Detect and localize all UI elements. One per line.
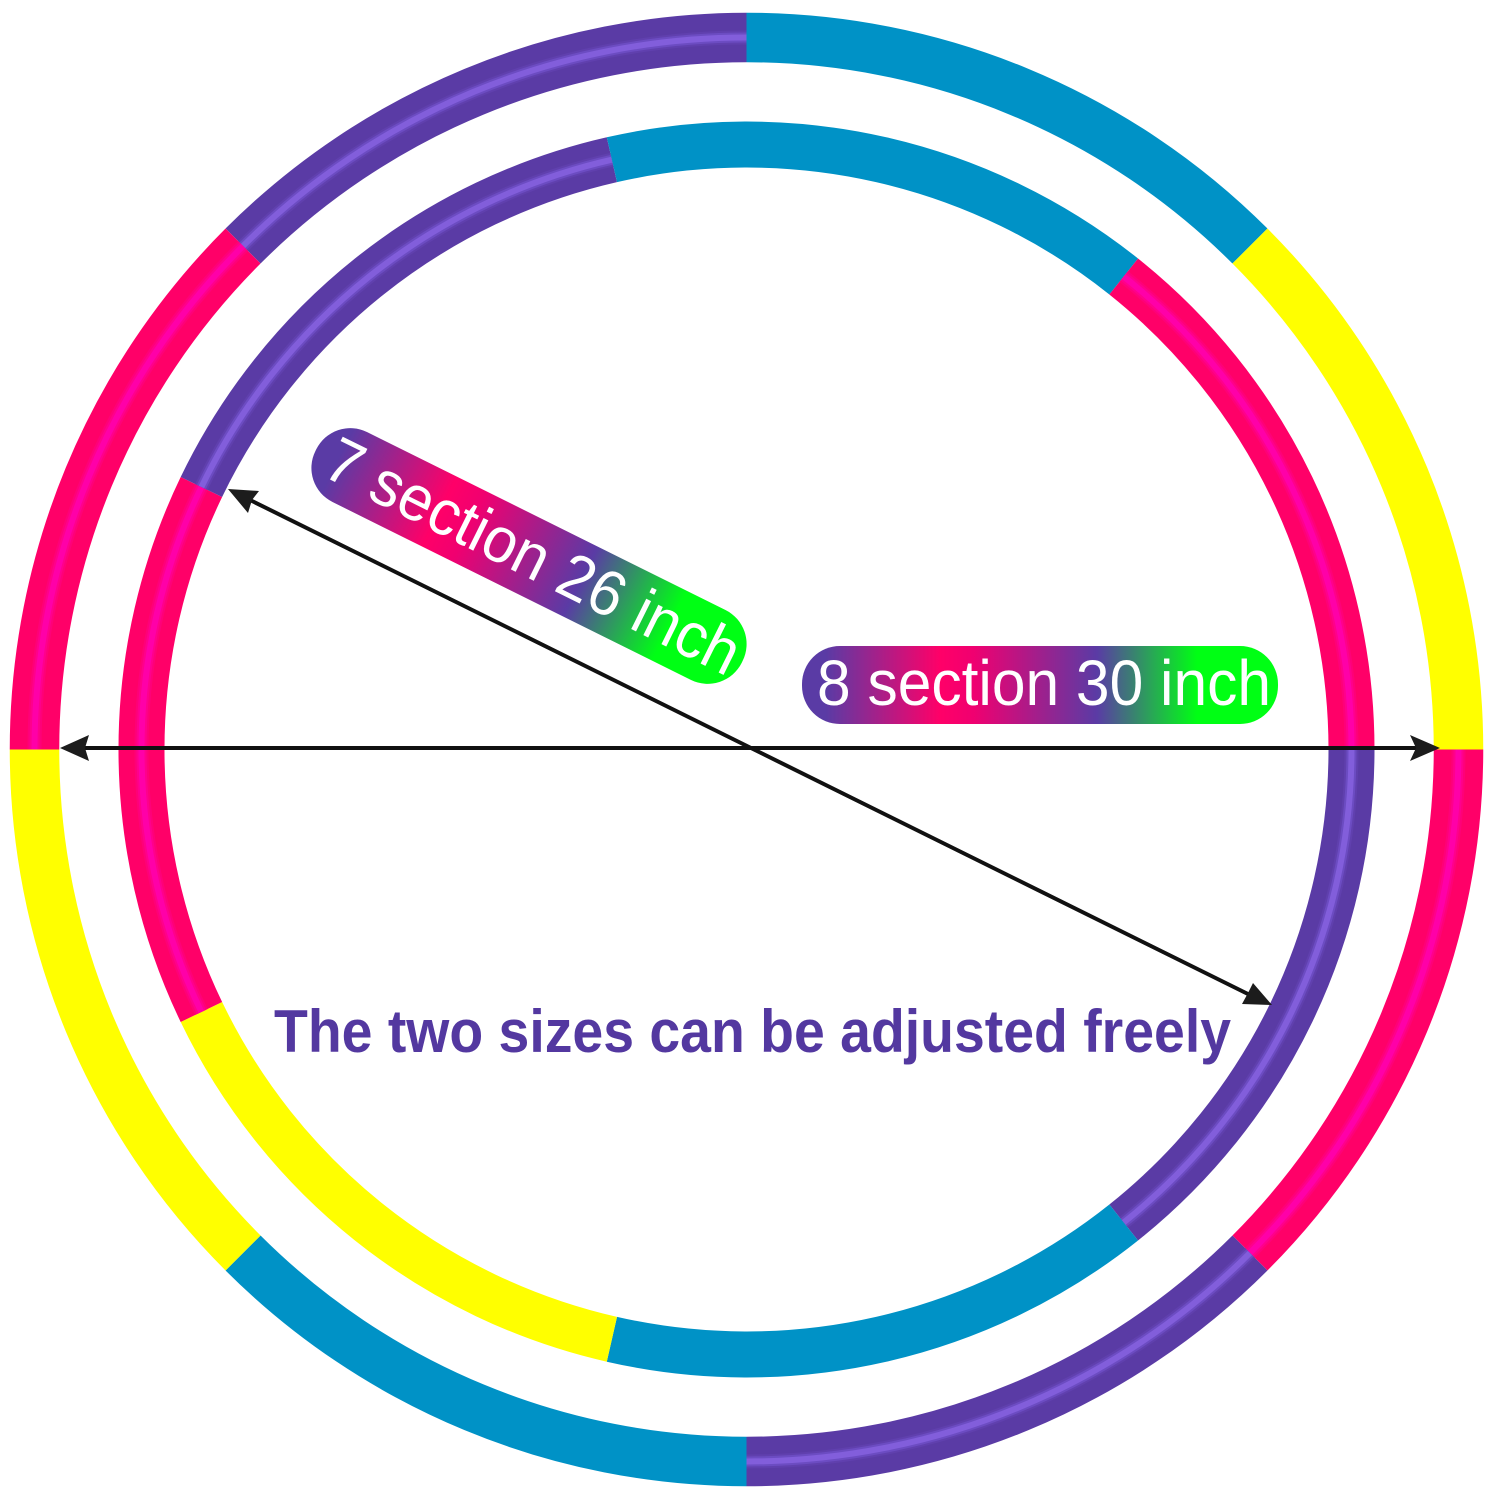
arrow: 30 inch horizontal diameter (60, 735, 1440, 761)
outer segment: pink left upper (34, 246, 243, 750)
inner segment: blue bottom (612, 1222, 1124, 1354)
inner segment: yellow bottom left (201, 1012, 612, 1339)
outer segment: blue bottom left (243, 1253, 747, 1462)
label pill: 8 section 30 inch: 8 section 30 inch (817, 647, 1271, 719)
inner segment: purple top left (201, 160, 612, 487)
inner segment: purple right lower (1124, 750, 1352, 1222)
outer segment: purple bottom right (746, 1253, 1250, 1462)
inner ring: 7 section hoop (141, 145, 1352, 1354)
inner segment: pink right upper (1124, 276, 1352, 750)
outer segment: purple top left (243, 38, 747, 246)
inner segment: blue top (612, 145, 1124, 276)
arrow: 26 inch diagonal diameter (228, 489, 1272, 1005)
caption text: The two sizes can be adjusted freely (274, 998, 1232, 1065)
outer segment: pink right lower (1250, 750, 1458, 1253)
label pill: 7 section 26 inch: 7 section 26 inch (314, 423, 753, 689)
outer segment: yellow right upper (1250, 246, 1458, 750)
outer segment: blue top right (746, 38, 1250, 246)
outer segment: yellow left lower (34, 750, 243, 1253)
inner segment: pink left (141, 487, 201, 1012)
